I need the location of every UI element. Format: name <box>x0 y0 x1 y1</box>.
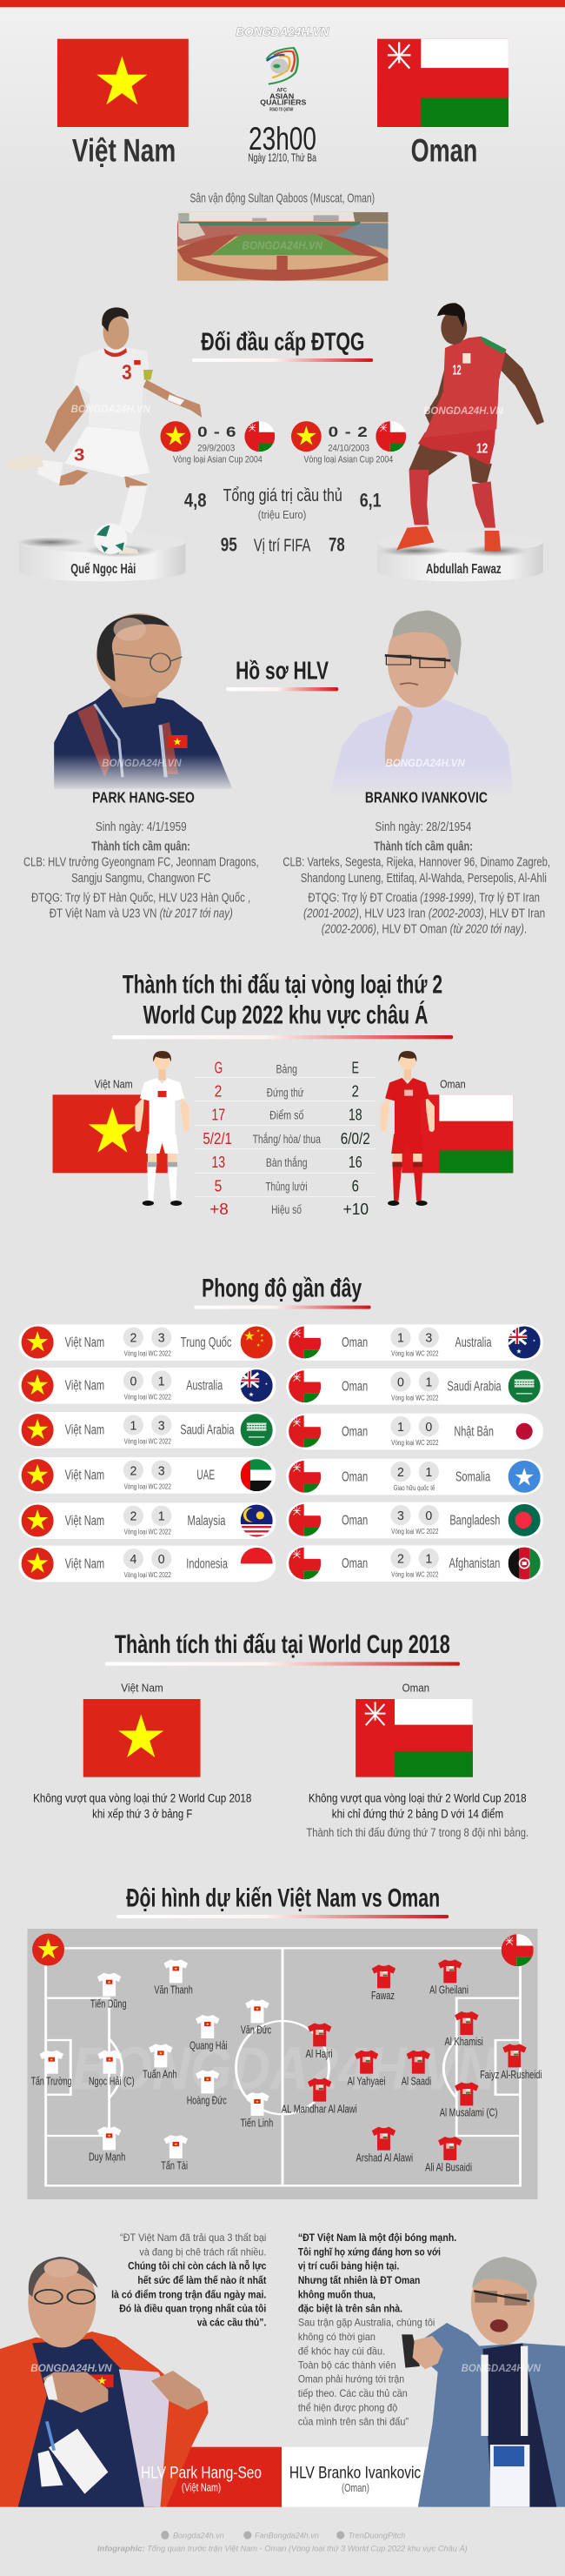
row: Việt Nam 4-0 Indonesia: Indonesia <box>186 1556 228 1571</box>
platform: left <box>17 532 185 581</box>
player: Abdullah Fawaz <box>396 303 544 551</box>
stats table: 6/0/2 <box>341 1130 370 1147</box>
row: Oman 2-1 Afghanistan: 1 <box>425 1551 432 1566</box>
photo: stadium: BONGDA24H.VN <box>243 240 323 252</box>
row: Oman 2-1 Afghanistan: 2 <box>397 1551 404 1566</box>
kickoff time: 23h00 <box>249 120 316 157</box>
heading: qualifying record <box>123 971 442 1030</box>
row: Oman 1-0 Nhật Bản: 1 <box>397 1420 404 1435</box>
player: Quế Ngọc Hải: 3 <box>122 360 132 384</box>
row: Việt Nam 2-3 UAE: Vòng loại WC 2022 <box>124 1482 171 1491</box>
quote: Park Hang-seo <box>111 2231 267 2328</box>
column: Vietnam: khi xếp thứ 3 ở bảng F <box>92 1808 193 1821</box>
row: Việt Nam 1-3 Saudi Arabia: Việt Nam <box>65 1422 104 1437</box>
icon: AFC Asian Qualifiers logo: ASIAN <box>269 92 294 101</box>
row: Oman 2-1 Somalia: Somalia <box>455 1469 490 1484</box>
team name: Oman: Oman <box>411 133 477 169</box>
lineup: Oman <box>282 1959 542 2174</box>
bio: Park Hang-Seo: Thành tích cầm quân: <box>91 839 190 853</box>
row: Oman 1-3 Australia: 1 <box>397 1330 404 1345</box>
lineup: Vietnam: Văn Thanh <box>154 1984 193 1997</box>
row: Oman 3-0 Bangladesh: 3 <box>397 1509 404 1523</box>
heading: Phong độ gần đây: Phong độ gần đây <box>202 1275 362 1303</box>
stats table: G <box>215 1059 223 1077</box>
name: Branko Ivankovic: (Oman) <box>342 2482 369 2495</box>
match: 29/9/2003 <box>160 421 275 465</box>
team flag: Oman <box>502 1934 534 1966</box>
lineup: Vietnam: Quang Hải <box>189 2040 228 2052</box>
row: Oman 2-1 Afghanistan: Vòng loại WC 2022 <box>391 1571 438 1579</box>
panel: recent form <box>19 1275 543 1582</box>
panel: coach quotes <box>0 2231 565 2553</box>
quote: Branko Ivankovic: không có thời gian <box>298 2330 376 2343</box>
row: Việt Nam 4-0 Indonesia: Vòng loại WC 2022 <box>124 1571 171 1580</box>
lineup: Vietnam: Tiến Linh <box>240 2118 273 2130</box>
stat: FIFA rank <box>221 535 345 556</box>
name: Park Hang-Seo: (Việt Nam) <box>182 2482 221 2494</box>
row: Việt Nam 2-3 UAE: 2 <box>130 1463 136 1478</box>
photo: Park Hang-seo: BONGDA24H.VN <box>102 757 182 769</box>
row: Oman 1-3 Australia: Oman <box>342 1335 368 1350</box>
row: Oman 0-1 Saudi Arabia: Saudi Arabia <box>447 1378 502 1394</box>
stats table: Đứng thứ <box>267 1087 304 1100</box>
lineup: Vietnam: Ngọc Hải (C) <box>89 2076 135 2088</box>
panel: match header <box>0 0 565 281</box>
lineup: Oman: Al Musalami (C) <box>440 2107 497 2119</box>
coach name: Park Hang-Seo: PARK HANG-SEO <box>92 789 195 806</box>
name: Park Hang-Seo <box>141 2463 262 2494</box>
footer credits: TrenDuongPitch <box>348 2531 405 2540</box>
stat: squad value <box>184 485 382 522</box>
row: Việt Nam 2-3 UAE: 3 <box>158 1463 165 1478</box>
platform: right <box>377 532 543 581</box>
stats table: 18 <box>349 1107 362 1124</box>
row: Việt Nam 2-3 UAE: Việt Nam <box>65 1467 104 1482</box>
stats table: +10 <box>343 1201 369 1218</box>
stats table: Bảng <box>276 1063 297 1076</box>
flag: Oman <box>377 39 508 127</box>
row: Việt Nam 2-1 Malaysia: 2 <box>130 1509 136 1523</box>
name: Branko Ivankovic: HLV Branko Ivankovic <box>289 2463 421 2482</box>
lineup: Vietnam: Tấn Tài <box>161 2160 188 2172</box>
row: Việt Nam 2-1 Malaysia <box>19 1502 276 1539</box>
match: 24/10/2003: 0 - 2 <box>329 424 368 440</box>
top red bar <box>0 0 565 7</box>
lineup: Vietnam: Tiến Dũng <box>90 1998 127 2011</box>
quote: Park Hang-seo: hết sức để làm thế nào ít nhất <box>137 2273 267 2286</box>
quote: Park Hang-seo: Chúng tôi chỉ còn cách là nỗ lực <box>128 2259 267 2272</box>
heading underline <box>105 1662 460 1666</box>
icon: AFC Asian Qualifiers logo <box>260 48 307 112</box>
bio: Park Hang-Seo <box>23 820 259 920</box>
icon: AFC Asian Qualifiers logo: QUALIFIERS <box>260 99 307 107</box>
row: Việt Nam 4-0 Indonesia: 4 <box>130 1552 136 1567</box>
flag: Vietnam <box>53 1094 168 1173</box>
match date: Ngày 12/10, Thứ Ba <box>248 151 316 164</box>
quote: Branko Ivankovic: không muốn thua, <box>298 2288 376 2300</box>
panel: World Cup 2018 <box>33 1630 528 1840</box>
stat: FIFA rank: 95 <box>221 535 237 556</box>
bio: Park Hang-Seo: ĐT Việt Nam và U23 VN (từ 2017 tới nay) <box>50 906 233 920</box>
row: Việt Nam 2-3 Trung Quốc: 3 <box>158 1330 165 1345</box>
row: Việt Nam 1-3 Saudi Arabia: 3 <box>158 1418 165 1433</box>
lineup: Vietnam: Tuấn Anh <box>143 2069 177 2081</box>
lineup: Oman: Fawaz <box>371 1990 395 2003</box>
row: Oman 1-0 Nhật Bản: Oman <box>342 1423 368 1439</box>
stat: squad value: 4,8 <box>184 491 207 512</box>
stats table: 5/2/1 <box>203 1130 232 1147</box>
player: Abdullah Fawaz: 12 <box>453 362 462 378</box>
stats table: Điểm số <box>269 1108 304 1122</box>
bio: Park Hang-Seo: ĐTQG: Trợ lý ĐT Hàn Quốc, HLV U23 Hàn Quốc , <box>31 890 250 905</box>
photo: Park Hang-seo <box>0 2257 209 2507</box>
flag: Oman <box>402 1094 513 1173</box>
row: Oman 1-3 Australia: 3 <box>425 1330 432 1345</box>
team flag: Vietnam <box>32 1934 64 1965</box>
player: Abdullah Fawaz: 12 <box>476 440 488 456</box>
row: Việt Nam 0-1 Australia: Vòng loại WC 2022 <box>124 1393 171 1402</box>
panel: World Cup 2022 qualifying stats <box>53 971 513 1218</box>
bio: Park Hang-Seo: Sinh ngày: 4/1/1959 <box>96 820 187 834</box>
player icon: Vietnam <box>135 1051 189 1206</box>
footer credits <box>97 2531 468 2553</box>
row: Việt Nam 1-3 Saudi Arabia <box>19 1412 276 1449</box>
stat: FIFA rank: Vị trí FIFA <box>254 535 311 555</box>
quote: Branko Ivankovic: thể hiện được phong độ <box>298 2401 397 2413</box>
row: Việt Nam 0-1 Australia: Việt Nam <box>65 1377 104 1393</box>
row: Việt Nam 1-3 Saudi Arabia: Saudi Arabia <box>180 1422 235 1437</box>
row: Oman 1-3 Australia: Australia <box>455 1335 492 1350</box>
quote: Park Hang-seo: là có điểm trong trận đấu ngày mai. <box>111 2288 266 2300</box>
photo: Park Hang-seo: BONGDA24H.VN <box>30 2362 112 2374</box>
stats table: Thủng lưới <box>266 1181 308 1194</box>
pitch <box>28 1929 537 2199</box>
quote: Branko Ivankovic: Toàn bộ các thành viên <box>298 2359 396 2371</box>
venue: Sân vận động Sultan Qaboos (Muscat, Oman) <box>189 191 375 205</box>
lineup: Oman: Al Hajri <box>306 2048 333 2061</box>
stat: squad value: 6,1 <box>360 491 382 512</box>
quote: Branko Ivankovic: Tôi nghĩ họ xứng đáng hơn so với <box>298 2245 441 2258</box>
form column: Vietnam <box>19 1324 276 1582</box>
form column: Oman <box>287 1324 543 1582</box>
panel: coach profiles <box>23 611 550 936</box>
row: Việt Nam 0-1 Australia: Australia <box>186 1377 223 1393</box>
stat: squad value: (triệu Euro) <box>258 508 306 522</box>
lineup: Vietnam: Văn Đức <box>241 2024 271 2037</box>
row: Việt Nam 4-0 Indonesia <box>19 1546 276 1582</box>
name: Branko Ivankovic <box>289 2463 421 2495</box>
quote: Branko Ivankovic: vị trí cuối bảng hiện tại. <box>298 2259 399 2272</box>
row: Oman 1-0 Nhật Bản: Nhật Bản <box>454 1423 494 1439</box>
row: Việt Nam 2-1 Malaysia: Việt Nam <box>65 1513 104 1529</box>
heading underline <box>116 1915 449 1918</box>
photo: Branko Ivankovic <box>324 611 519 800</box>
label: Quế Ngọc Hải: Quế Ngọc Hải <box>70 561 136 577</box>
heading: Hồ sơ HLV: Hồ sơ HLV <box>236 657 329 685</box>
label: Oman: Oman <box>440 1079 466 1091</box>
row: Oman 1-0 Nhật Bản: Vòng loại WC 2022 <box>391 1439 438 1448</box>
row: Oman 3-0 Bangladesh: 0 <box>425 1509 432 1523</box>
quote: Park Hang-seo: Đó là điều quan trọng nhất của tôi <box>119 2302 266 2314</box>
stats table: 6 <box>352 1177 359 1195</box>
row: Việt Nam 2-3 Trung Quốc: Vòng loại WC 2022 <box>124 1350 171 1358</box>
quote: Branko Ivankovic: Oman phải hướng tới trận <box>298 2372 404 2385</box>
row: Việt Nam 0-1 Australia: 1 <box>158 1374 165 1388</box>
footer credits: FanBongda24h.vn <box>255 2531 319 2540</box>
row: Oman 0-1 Saudi Arabia <box>287 1368 543 1405</box>
row: Oman 2-1 Somalia: Giao hữu quốc tế <box>394 1484 435 1493</box>
stats table: Hiệu số <box>271 1203 302 1217</box>
player: Quế Ngọc Hải: 3 <box>74 445 84 465</box>
row: Oman 3-0 Bangladesh: Oman <box>342 1512 368 1528</box>
bio: Branko Ivankovic: Sinh ngày: 28/2/1954 <box>376 820 471 834</box>
name bar: white <box>282 2447 433 2507</box>
row: Oman 0-1 Saudi Arabia: 0 <box>397 1375 404 1389</box>
lineup: Oman: Al Saadi <box>402 2076 431 2088</box>
row: Oman 2-1 Somalia: 2 <box>397 1465 404 1480</box>
watermark logo: BONGDA24H.VN <box>236 25 329 39</box>
quote: Branko Ivankovic: Nhưng tất nhiên là ĐT Oman <box>298 2273 420 2286</box>
lineup: Oman: Al Khamisi <box>445 2036 483 2049</box>
stat: squad value: Tổng giá trị cầu thủ <box>223 485 342 505</box>
lineup: Oman: Ali Al Busaidi <box>425 2162 472 2174</box>
coach name: Branko Ivankovic: BRANKO IVANKOVIC <box>365 789 488 806</box>
bio: Branko Ivankovic <box>282 820 550 936</box>
bio: Park Hang-Seo: CLB: HLV trưởng Gyeongnam FC, Jeonnam Dragons, <box>23 854 259 869</box>
photo: Branko Ivankovic: BONGDA24H.VN <box>462 2362 541 2374</box>
row: Việt Nam 1-3 Saudi Arabia: Vòng loại WC 2022 <box>124 1437 171 1446</box>
lineup: Oman: Al Yahyaei <box>348 2076 386 2088</box>
stats table: 16 <box>349 1154 362 1171</box>
row: Oman 0-1 Saudi Arabia: Oman <box>342 1378 368 1394</box>
footer credits: Tổng quan trước trận Việt Nam - Oman (Vòng loại thứ 3 World Cup 2022 khu vực Châu Á) <box>147 2543 468 2553</box>
stats table: 13 <box>211 1154 225 1171</box>
quote: Park Hang-seo: và các cầu thủ”. <box>197 2316 266 2328</box>
quote: Park Hang-seo: và đang bị chê trách rất nhiều. <box>139 2245 266 2258</box>
row: Oman 2-1 Somalia: 1 <box>425 1465 432 1480</box>
quote: Branko Ivankovic: đặc biệt là trên sân nhà. <box>298 2302 402 2314</box>
lineup: Oman: AL Mandhar Al Alawi <box>282 2104 357 2116</box>
match: 29/9/2003: 0 - 6 <box>197 424 236 440</box>
heading underline <box>226 687 338 691</box>
name bar: red <box>166 2447 282 2507</box>
player: Quế Ngọc Hải <box>5 307 202 554</box>
row: Việt Nam 2-3 Trung Quốc <box>19 1324 276 1361</box>
row: Oman 3-0 Bangladesh: Bangladesh <box>449 1512 500 1528</box>
stats table: 2 <box>215 1082 222 1101</box>
stats table: Thắng/ hòa/ thua <box>253 1132 321 1147</box>
row: Oman 2-1 Somalia: Oman <box>342 1469 368 1484</box>
row: Oman 0-1 Saudi Arabia: 1 <box>425 1375 432 1389</box>
name: Park Hang-Seo: HLV Park Hang-Seo <box>141 2463 262 2482</box>
row: Oman 0-1 Saudi Arabia: Vòng loại WC 2022 <box>391 1394 438 1402</box>
stats table: Bàn thắng <box>266 1155 308 1170</box>
stats table <box>195 1059 376 1218</box>
heading underline <box>112 1035 453 1039</box>
quote: Branko Ivankovic: để khóc hay cúi đầu. <box>298 2345 385 2357</box>
quote: Branko Ivankovic: của mình trên sân thi đấu” <box>298 2415 409 2427</box>
lineup: Vietnam: Tấn Trường <box>31 2076 72 2088</box>
lineup: Oman: Arshad Al Alawi <box>356 2152 413 2165</box>
row: Việt Nam 2-3 UAE: UAE <box>196 1467 215 1482</box>
row: Oman 1-3 Australia <box>287 1324 543 1361</box>
label: Abdullah Fawaz: Abdullah Fawaz <box>426 561 502 577</box>
lineup: Vietnam: Duy Mạnh <box>89 2151 125 2164</box>
stats table: 17 <box>211 1107 225 1124</box>
heading underline <box>192 358 373 362</box>
icon: AFC Asian Qualifiers logo: ROAD TO QATAR <box>269 108 293 112</box>
match: 24/10/2003: 24/10/2003 <box>328 442 369 453</box>
player: Quế Ngọc Hải: BONGDA24H.VN <box>71 403 150 415</box>
row: Oman 2-1 Afghanistan: Oman <box>342 1556 368 1571</box>
footer credits: Infographic: <box>97 2544 145 2553</box>
bio: Park Hang-Seo: Sangju Sangmu, Changwon FC <box>71 871 211 886</box>
row: Việt Nam 2-1 Malaysia: Vòng loại WC 2022 <box>124 1529 171 1536</box>
column: Vietnam: Việt Nam <box>121 1682 163 1695</box>
row: Oman 3-0 Bangladesh <box>287 1502 543 1538</box>
stat: FIFA rank: 78 <box>329 535 345 556</box>
row: Việt Nam 2-3 Trung Quốc: Việt Nam <box>65 1335 104 1350</box>
icon: AFC Asian Qualifiers logo: AFC <box>276 88 287 93</box>
row: Việt Nam 2-1 Malaysia: Malaysia <box>188 1513 226 1529</box>
footer credits: Bongda24h.vn <box>173 2531 224 2540</box>
bio: Branko Ivankovic: (2002-2006), HLV ĐT Oman (từ 2020 tới nay). <box>322 921 527 936</box>
photo: Branko Ivankovic <box>402 2257 565 2507</box>
lineup: Vietnam <box>31 1959 273 2172</box>
column: Vietnam: Không vượt qua vòng loại thứ 2 World Cup 2018 <box>33 1792 252 1805</box>
bio: Branko Ivankovic: Thành tích cầm quân: <box>374 839 473 853</box>
row: Việt Nam 4-0 Indonesia: 0 <box>158 1552 165 1567</box>
row: Việt Nam 1-3 Saudi Arabia: 1 <box>130 1418 136 1433</box>
photo: stadium <box>177 211 388 281</box>
match: 29/9/2003: 29/9/2003 <box>197 442 235 453</box>
lineup: Vietnam: Hoàng Đức <box>187 2095 227 2107</box>
quote: Branko Ivankovic: tiếp theo. Các cầu thủ cần <box>298 2386 408 2399</box>
heading: Đối đầu cấp ĐTQG: Đối đầu cấp ĐTQG <box>201 328 365 356</box>
stats table: 5 <box>215 1177 222 1195</box>
stats table: +8 <box>209 1201 229 1218</box>
row: Việt Nam 2-3 UAE <box>19 1457 276 1494</box>
flag: Vietnam <box>57 39 189 127</box>
match: 24/10/2003: Vòng loại Asian Cup 2004 <box>303 453 393 465</box>
panel: predicted lineups <box>28 1884 542 2199</box>
row: Oman 1-3 Australia: Vòng loại WC 2022 <box>391 1350 438 1358</box>
photo: Branko Ivankovic: BONGDA24H.VN <box>386 757 465 769</box>
row: Oman 2-1 Afghanistan: Afghanistan <box>449 1556 500 1571</box>
match: 29/9/2003: Vòng loại Asian Cup 2004 <box>173 453 263 465</box>
label: Việt Nam: Việt Nam <box>95 1079 133 1091</box>
photo: Park Hang-seo <box>50 613 238 792</box>
player: Abdullah Fawaz: BONGDA24H.VN <box>423 405 503 417</box>
column: Oman: Oman <box>402 1682 429 1695</box>
row: Oman 1-0 Nhật Bản <box>287 1414 543 1449</box>
row: Việt Nam 2-1 Malaysia: 1 <box>158 1509 165 1523</box>
heading underline <box>194 1306 371 1309</box>
quote: Branko Ivankovic: Sau trận gặp Australia, chúng tôi <box>298 2316 435 2328</box>
row: Việt Nam 4-0 Indonesia: Việt Nam <box>65 1556 104 1571</box>
row: Việt Nam 0-1 Australia: 0 <box>130 1374 136 1388</box>
row: Oman 2-1 Afghanistan <box>287 1545 543 1582</box>
row: Oman 1-0 Nhật Bản: 0 <box>425 1420 432 1435</box>
quote: Park Hang-seo: “ĐT Việt Nam đã trải qua 3 thất bại <box>120 2231 266 2244</box>
stats table: 2 <box>352 1082 359 1101</box>
panel: head to head <box>5 303 544 581</box>
row: Oman 3-0 Bangladesh: Vòng loại WC 2022 <box>391 1528 438 1536</box>
row: Việt Nam 0-1 Australia <box>19 1368 276 1404</box>
column: Vietnam <box>33 1682 252 1821</box>
quote: Branko Ivankovic: “ĐT Việt Nam là một đội bóng mạnh. <box>298 2231 456 2244</box>
player icon: Oman <box>381 1051 435 1206</box>
team name: Việt Nam: Việt Nam <box>72 133 176 169</box>
quote: Branko Ivankovic <box>298 2231 456 2427</box>
stats table: E <box>352 1059 359 1077</box>
lineup: Oman: Al Gheilani <box>429 1984 469 1997</box>
column: Oman <box>306 1682 528 1840</box>
row: Việt Nam 2-3 Trung Quốc: 2 <box>130 1330 136 1345</box>
row: Oman 2-1 Somalia <box>287 1459 543 1495</box>
row: Việt Nam 2-3 Trung Quốc: Trung Quốc <box>181 1335 232 1350</box>
match: 24/10/2003 <box>291 421 406 465</box>
